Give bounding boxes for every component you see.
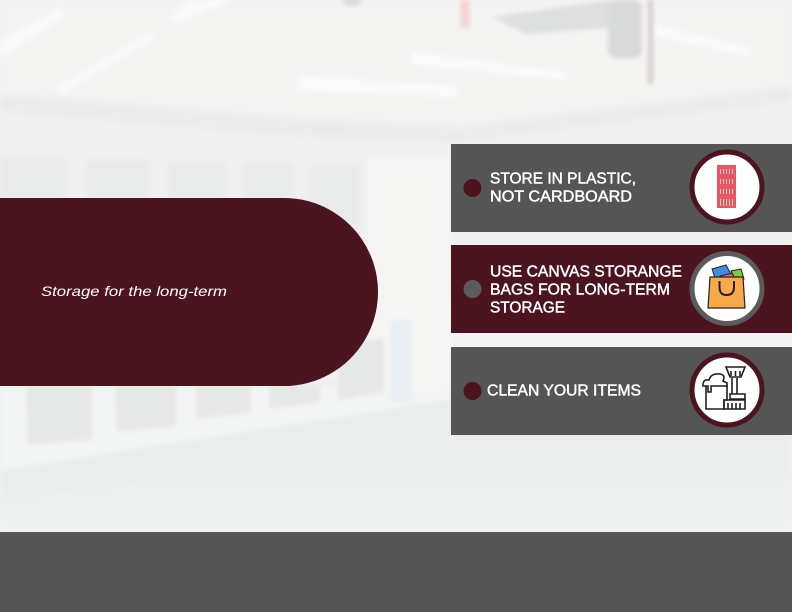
bar text: BAGS FOR LONG-TERM bbox=[490, 282, 670, 298]
bar text: USE CANVAS STORANGE bbox=[490, 264, 682, 280]
panel text: Storage for the long-term bbox=[41, 283, 227, 299]
bar text: STORAGE bbox=[490, 300, 565, 316]
bullet bbox=[464, 280, 482, 298]
bar text: STORE IN PLASTIC, bbox=[490, 170, 636, 188]
bar text: NOT CARDBOARD bbox=[490, 188, 632, 206]
bullet bbox=[464, 382, 482, 400]
panel: storage for the long-term bbox=[0, 198, 378, 386]
bar text: CLEAN YOUR ITEMS bbox=[487, 382, 641, 400]
icon: shopping bag bbox=[692, 254, 762, 324]
icon: plastic crates bbox=[692, 152, 762, 222]
bar: canvas storage bags bbox=[451, 245, 792, 333]
bullet bbox=[464, 179, 482, 197]
footer band bbox=[0, 532, 792, 612]
bar: store in plastic bbox=[451, 144, 792, 232]
icon: paint bucket and brush bbox=[692, 355, 762, 425]
bar: clean your items bbox=[451, 347, 792, 435]
